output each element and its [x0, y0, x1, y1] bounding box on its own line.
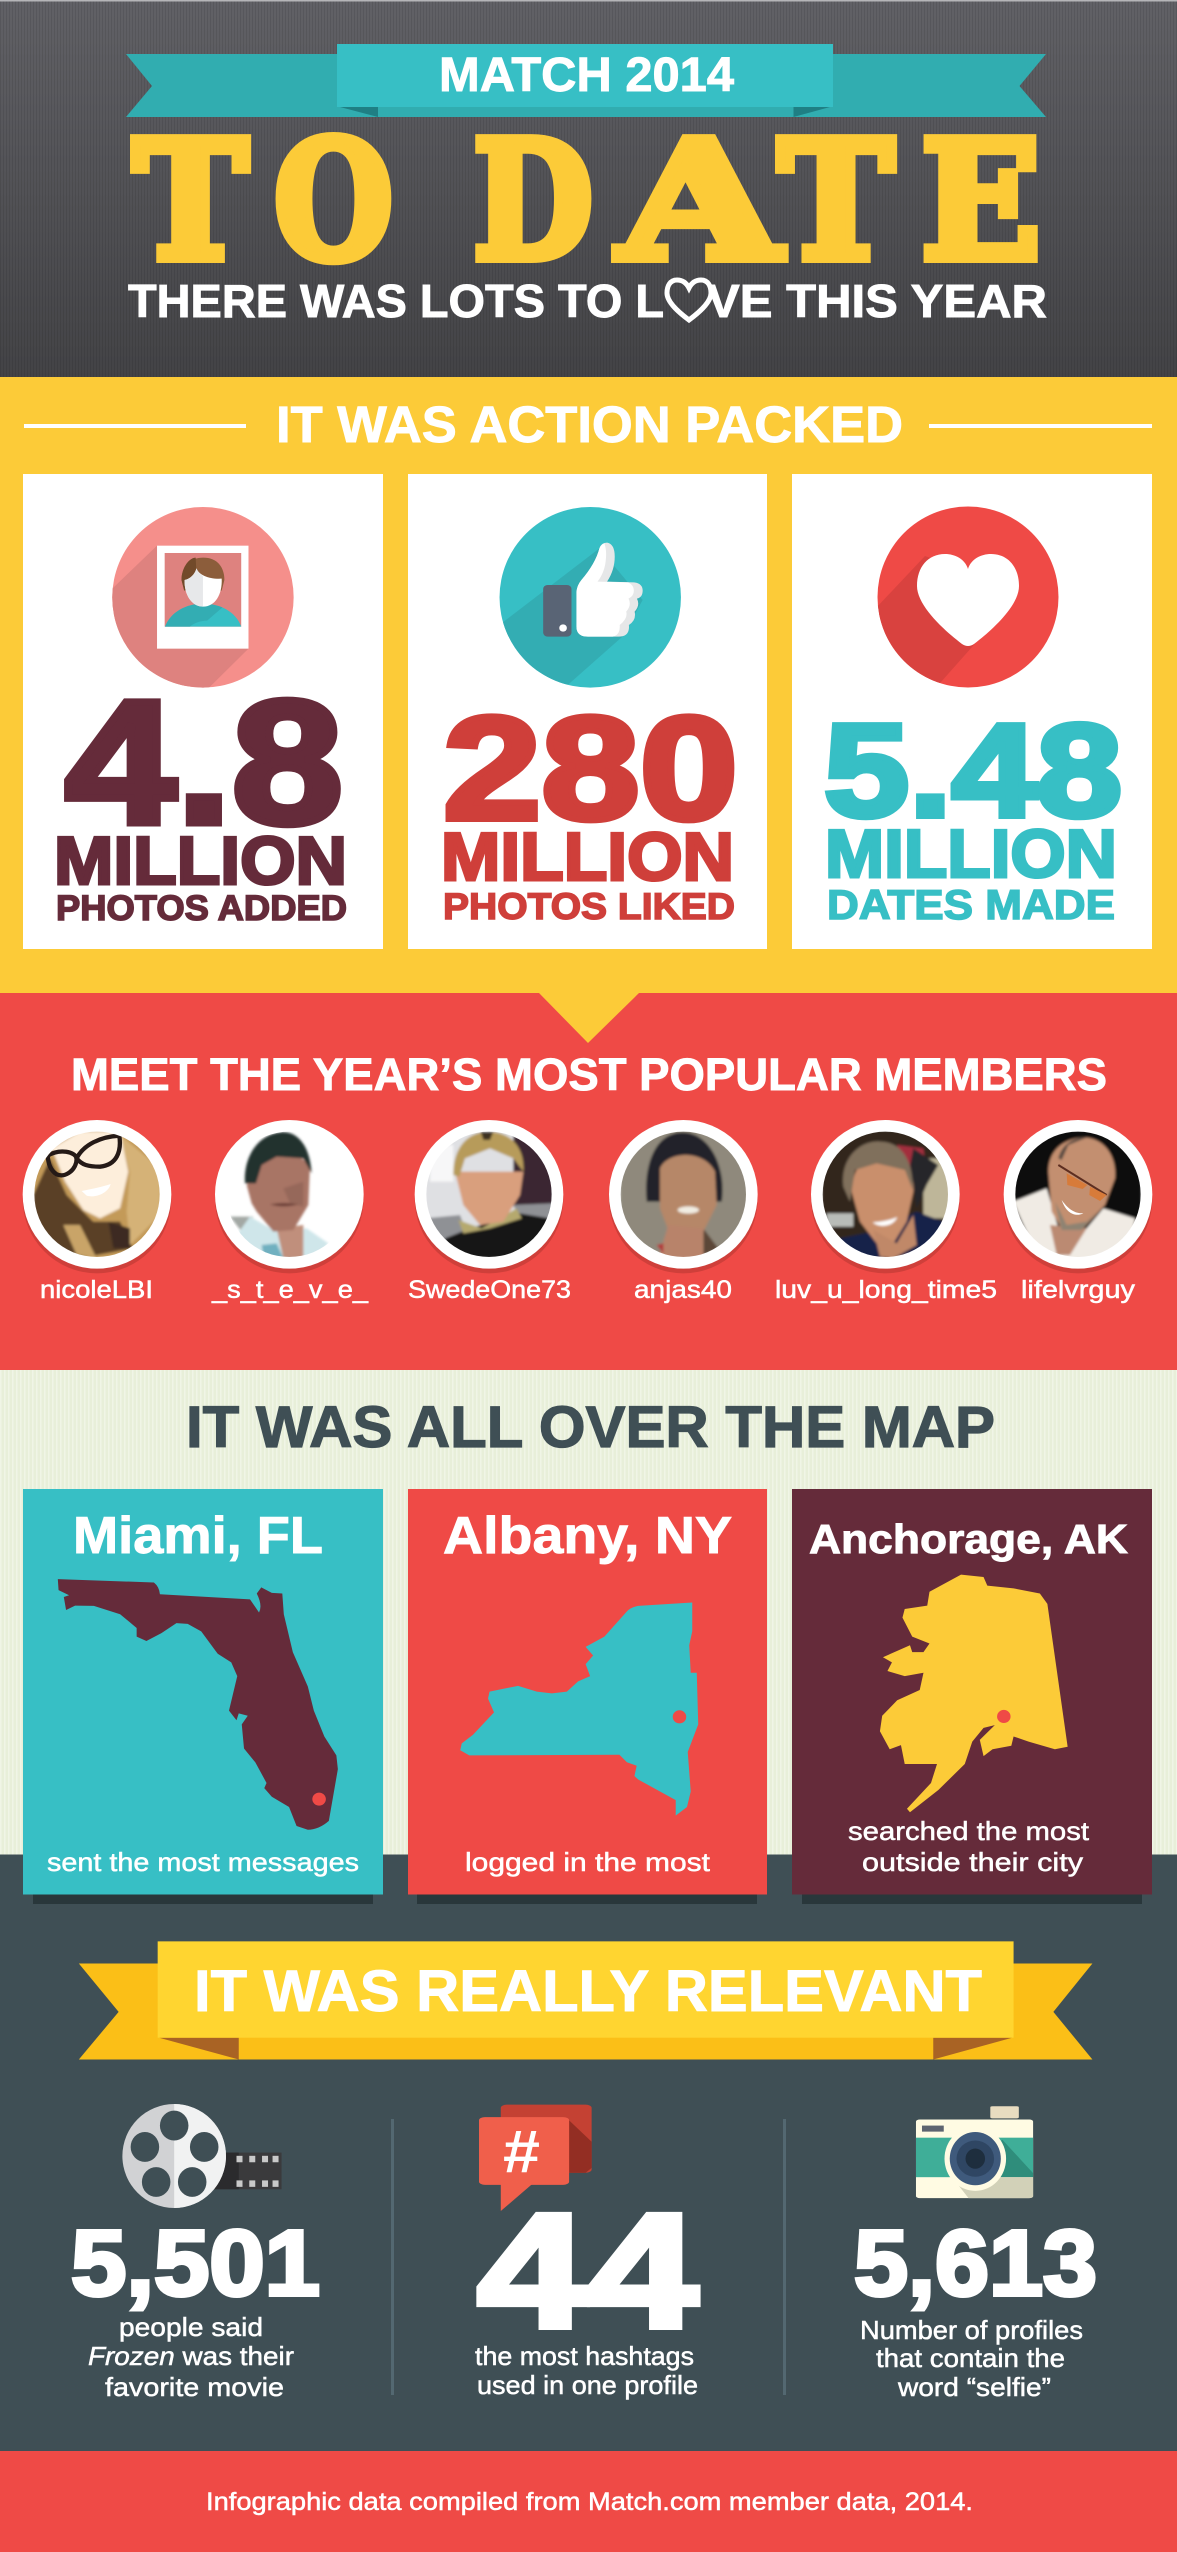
caption: hashtags: the most hashtags	[475, 2341, 694, 2371]
avatar: _s_t_e_v_e_	[215, 1120, 364, 1273]
title: to date: A	[616, 106, 783, 297]
card: Anchorage	[792, 1489, 1152, 1904]
panel: popular members	[0, 993, 1177, 1370]
caption: Albany: logged in the most	[465, 1847, 711, 1877]
name: _s_t_e_v_e_: _s_t_e_v_e_	[211, 1276, 369, 1304]
heading: action packed: IT WAS ACTION PACKED	[276, 396, 903, 453]
avatar: anjas40	[609, 1120, 758, 1273]
icon: camera	[916, 2106, 1033, 2198]
map: Florida	[58, 1579, 338, 1830]
header panel	[0, 0, 1177, 377]
name: anjas40: anjas40	[634, 1276, 732, 1304]
caption: frozen: Frozen was their	[88, 2341, 294, 2371]
name: luv_u_long_time5: luv_u_long_time5	[775, 1276, 997, 1304]
stat: frozen	[71, 2104, 320, 2402]
avatar: luv_u_long_time5	[811, 1120, 960, 1273]
number: 44: 44	[477, 2179, 698, 2362]
label: million: MILLION	[54, 823, 347, 899]
tagline: VE THIS YEAR	[707, 275, 1047, 327]
icon: film reel	[122, 2104, 282, 2208]
stat: hashtags	[475, 2105, 698, 2400]
caption: Miami: sent the most messages	[47, 1847, 359, 1877]
icon: hashtag bubble	[479, 2105, 592, 2211]
name: nicoleLBI: nicoleLBI	[40, 1276, 153, 1304]
caption: selfie: Number of profiles	[860, 2315, 1083, 2345]
avatar: nicoleLBI	[23, 1120, 171, 1273]
card: photos liked	[408, 474, 767, 949]
caption: frozen	[88, 2312, 294, 2402]
tagline: THERE WAS LOTS TO L	[128, 275, 664, 327]
caption: Anchorage: searched the most	[848, 1816, 1090, 1846]
caption: selfie: word “selfie”	[897, 2372, 1051, 2402]
panel: action packed	[0, 377, 1177, 994]
city: Albany: Albany, NY	[443, 1507, 732, 1565]
caption: selfie: that contain the	[876, 2343, 1065, 2373]
city: Miami: Miami, FL	[73, 1507, 323, 1565]
number: 5.48: 5.48	[824, 697, 1122, 844]
title: to date: T	[133, 106, 248, 297]
title: to date: E	[921, 106, 1041, 297]
avatar: SwedeOne73	[415, 1120, 563, 1273]
name: lifelvrguy: lifelvrguy	[1021, 1276, 1136, 1304]
caption: hashtags: used in one profile	[477, 2370, 698, 2400]
icon: thumbs up	[500, 507, 681, 688]
map: New York	[460, 1602, 698, 1816]
number: 280: 280	[443, 687, 738, 851]
name: SwedeOne73: SwedeOne73	[408, 1276, 571, 1304]
icon: heart in tagline	[667, 280, 711, 320]
ribbon: really relevant: IT WAS REALLY RELEVANT	[194, 1959, 982, 2024]
avatar: lifelvrguy	[1004, 1120, 1152, 1273]
caption: Anchorage	[848, 1816, 1090, 1877]
icon: heart	[878, 506, 1058, 688]
stat: selfie	[854, 2106, 1097, 2402]
caption: Anchorage: outside their city	[862, 1847, 1083, 1877]
card: dates made	[792, 474, 1152, 949]
label: million: MILLION	[825, 816, 1117, 892]
number: 5,501: 5,501	[71, 2211, 320, 2315]
caption: hashtags	[475, 2341, 698, 2400]
caption: frozen: favorite movie	[105, 2372, 284, 2402]
card: photos added	[23, 474, 383, 949]
card: Albany	[408, 1489, 767, 1904]
map: Alaska	[880, 1575, 1068, 1812]
label: photos added: PHOTOS ADDED	[56, 889, 347, 928]
ribbon: match 2014	[126, 44, 1046, 117]
title: to date: T	[778, 106, 894, 297]
heading: all over the map: IT WAS ALL OVER THE MAP	[186, 1395, 995, 1460]
icon: hashtag bubble: #	[503, 2118, 540, 2185]
title: to date: O	[274, 106, 393, 297]
footer	[0, 2451, 1177, 2552]
footer: Infographic data compiled from Match.com member data, 2014.	[206, 2488, 973, 2516]
icon: photo portrait	[112, 507, 294, 688]
label: million: MILLION	[441, 819, 734, 895]
card: Miami	[23, 1489, 383, 1904]
label: dates made: DATES MADE	[827, 881, 1115, 928]
heading: popular members: MEET THE YEAR’S MOST POPULAR MEMBERS	[71, 1049, 1107, 1100]
ribbon: match 2014: MATCH 2014	[439, 49, 734, 102]
title: to date: D	[473, 106, 593, 297]
ribbon: really relevant	[79, 1941, 1092, 2059]
label: photos liked: PHOTOS LIKED	[443, 886, 735, 927]
panel: really relevant	[71, 1941, 1097, 2402]
number: 4.8: 4.8	[65, 665, 343, 861]
city: Anchorage: Anchorage, AK	[809, 1516, 1128, 1562]
number: 5,613: 5,613	[854, 2211, 1097, 2315]
caption: frozen: people said	[119, 2312, 263, 2342]
caption: selfie	[860, 2315, 1083, 2402]
panel: all over the map	[0, 1370, 1177, 2452]
